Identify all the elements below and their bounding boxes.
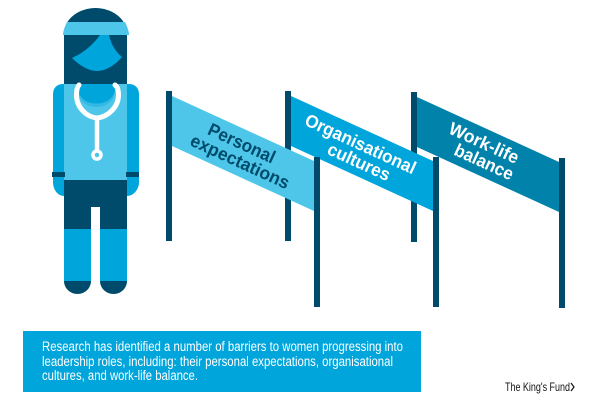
banner label: Work-life [446, 118, 522, 168]
torso [64, 84, 127, 181]
caption text [42, 339, 403, 383]
banner label: balance [451, 140, 517, 184]
neck [78, 84, 115, 104]
neck shadow [78, 84, 115, 107]
banner [291, 96, 433, 211]
back post [166, 91, 172, 241]
arms [53, 84, 139, 196]
shorts [64, 180, 127, 229]
figure: woman doctor [52, 8, 139, 294]
caption text: Research has identified a number of barriers to women progressing into [42, 339, 403, 354]
headband [63, 22, 129, 35]
hurdle: work-life balance [411, 92, 565, 308]
banner label: expectations [187, 130, 293, 193]
banner [172, 96, 314, 211]
hair [64, 8, 127, 84]
banner label: Organisational [302, 110, 419, 178]
front post [433, 157, 439, 307]
caption background [23, 331, 421, 392]
face [72, 35, 122, 71]
banner label: cultures [324, 139, 394, 185]
left leg [64, 229, 91, 281]
caption box [23, 331, 421, 392]
front post [314, 157, 320, 307]
caption text: cultures, and work-life balance. [42, 368, 198, 383]
right shoe [100, 281, 127, 294]
left cuff [52, 172, 65, 177]
right leg [100, 229, 127, 281]
front post [559, 158, 565, 308]
caption text: leadership roles, including: their personal expectations, organisational [42, 354, 393, 369]
logo chevron [571, 383, 574, 391]
logo wordmark: The King's Fund [505, 380, 570, 394]
back post [285, 91, 291, 241]
hurdle: organisational cultures [285, 91, 439, 307]
banner label: Personal [205, 119, 279, 167]
stethoscope [76, 85, 118, 159]
right cuff [126, 172, 139, 177]
back post [411, 92, 417, 242]
hurdle: personal expectations [166, 91, 320, 307]
banner [417, 97, 559, 212]
logo: The King's Fund [505, 380, 574, 394]
left shoe [64, 281, 91, 294]
